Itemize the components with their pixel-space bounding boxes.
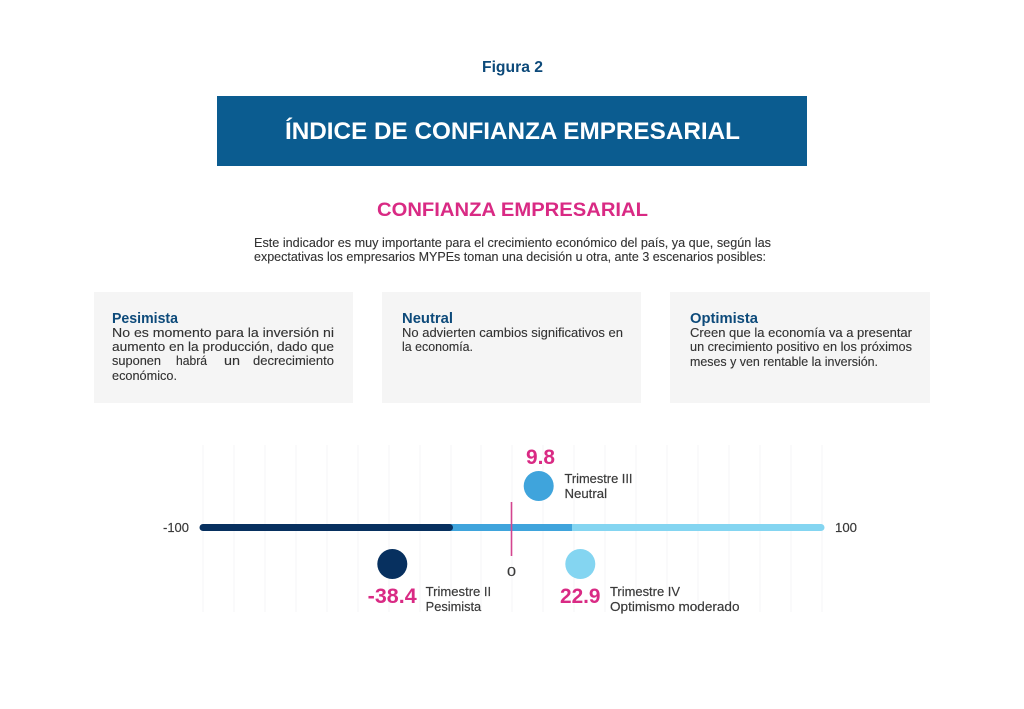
section heading: CONFIANZA EMPRESARIAL	[377, 199, 648, 221]
data point: trimestre IV: Optimismo moderado	[610, 600, 740, 614]
panel: pesimista	[94, 292, 353, 403]
data point: trimestre II: Pesimista	[426, 600, 481, 614]
panel: pesimista: habrá	[176, 354, 207, 368]
panel: pesimista: decrecimiento	[253, 354, 334, 368]
panel: optimista	[670, 292, 930, 403]
axis label: 0: 0	[507, 565, 516, 579]
data point: trimestre II: Trimestre II	[426, 585, 491, 599]
intro text: Este indicador es muy importante para el crecimiento económico del país, ya que, según las	[254, 236, 771, 250]
chart: confidence scale	[163, 445, 857, 614]
intro text: expectativas los empresarios MYPEs toman una decisión u otra, ante 3 escenarios posibles:	[254, 250, 766, 264]
panel: pesimista: un	[224, 354, 240, 368]
axis label: 100: 100	[835, 521, 857, 535]
panel: neutral: No advierten cambios significativos en	[402, 326, 623, 340]
data point: trimestre III	[524, 446, 632, 501]
axis label: -100: -100	[163, 521, 189, 535]
panel: optimista: Creen que la economía va a presentar	[690, 326, 912, 340]
panel: neutral: Neutral	[402, 311, 453, 327]
intro text	[254, 236, 771, 264]
data point: trimestre II	[368, 549, 491, 614]
data point: trimestre III: 9.8	[526, 446, 555, 469]
data point: trimestre III: Neutral	[564, 487, 607, 501]
panel: pesimista: suponen	[112, 354, 161, 368]
panel: neutral: la economía.	[402, 340, 473, 354]
data point: trimestre IV: 22.9	[560, 585, 600, 608]
panel: optimista: Optimista	[690, 311, 759, 327]
panel: pesimista: económico.	[112, 369, 177, 383]
panel: neutral	[382, 292, 641, 403]
scale bar	[200, 524, 824, 531]
panel: optimista: un crecimiento positivo en los próximos	[690, 340, 912, 354]
panel: pesimista: aumento en la producción, dado que	[112, 340, 334, 354]
zero marker	[511, 502, 512, 556]
panel: pesimista: Pesimista	[112, 311, 179, 327]
data point: trimestre II: -38.4	[368, 585, 417, 608]
title banner: ÍNDICE DE CONFIANZA EMPRESARIAL	[285, 117, 740, 145]
panel: optimista: meses y ven rentable la inversión.	[690, 355, 878, 369]
data point: trimestre IV	[560, 549, 740, 614]
figure label: Figura 2	[482, 59, 543, 76]
data point: trimestre IV: Trimestre IV	[610, 585, 681, 599]
data point: trimestre III: Trimestre III	[564, 472, 632, 486]
title banner	[217, 96, 807, 166]
panel: pesimista: No es momento para la inversión ni	[112, 326, 334, 340]
